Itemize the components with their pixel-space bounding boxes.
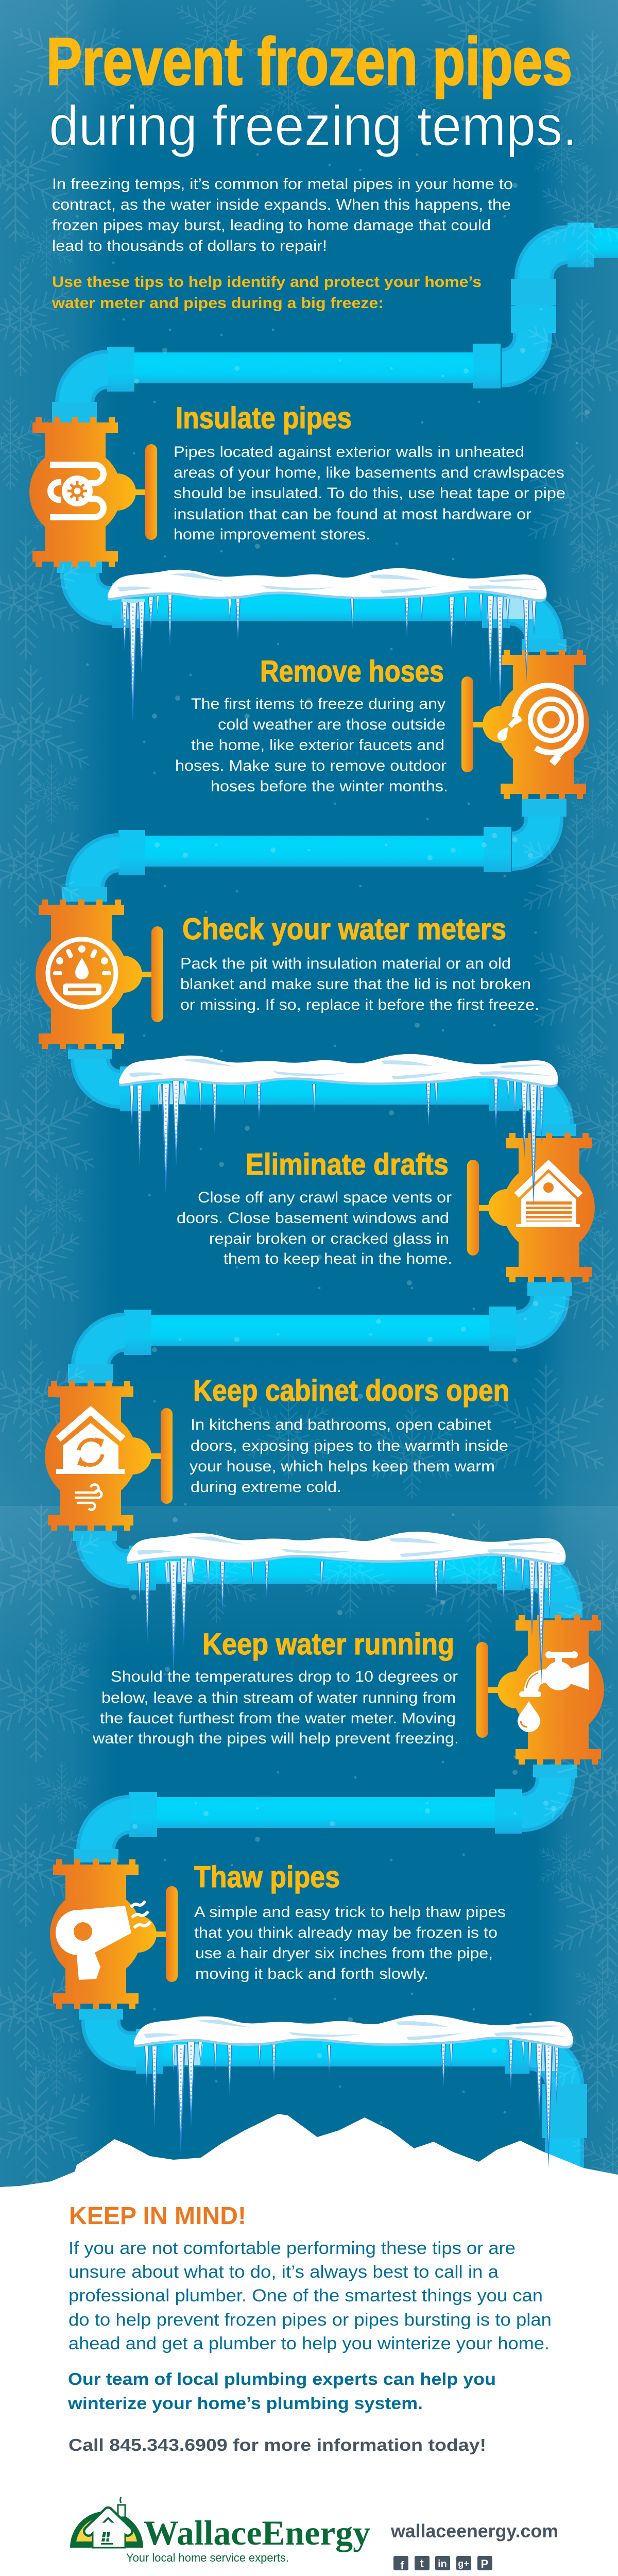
pipe run: valve 6 to valve 7 (74, 1765, 577, 1862)
Wallace Energy logo: Your local home service experts. (126, 2551, 289, 2564)
tip: Check your water meters: Check your water meters (182, 912, 506, 946)
title: during freezing temps. (49, 94, 577, 158)
tip: Keep water running (92, 1628, 459, 1747)
tip: Remove hoses: the home, like exterior faucets and (191, 737, 444, 754)
tip: Keep water running: Keep water running (202, 1628, 454, 1661)
intro text (52, 176, 513, 255)
valve 7 with hair dryer icon (50, 1859, 178, 2009)
Wallace Energy logo (70, 2497, 370, 2564)
pipe run: valve 4 to valve 5 (68, 1282, 572, 1383)
snow cap and icicles 3 (127, 1532, 565, 1685)
social icons: t (420, 2557, 424, 2570)
tip: Thaw pipes: moving it back and forth slowly. (195, 1965, 428, 1982)
social icons: f (400, 2559, 404, 2572)
tip: Remove hoses (175, 655, 448, 795)
tip: Remove hoses: hoses before the winter months. (211, 778, 448, 795)
tip: Thaw pipes: Thaw pipes (194, 1860, 340, 1894)
keep in mind paragraph: ahead and get a plumber to help you winterize your home. (68, 2334, 550, 2353)
pipe run: valve 1 to valve 2 (57, 562, 566, 652)
tip: Thaw pipes (194, 1860, 506, 1982)
tip: Keep cabinet doors open (190, 1374, 509, 1496)
pipe run: valve 3 to valve 4 (68, 1049, 576, 1136)
keep in mind paragraph: professional plumber. One of the smartest things you can (68, 2286, 543, 2306)
keep in mind paragraph (68, 2239, 552, 2353)
keep in mind paragraph: do to help prevent frozen pipes or pipes bursting is to plan (68, 2310, 552, 2330)
keep in mind paragraph: If you are not comfortable performing these tips or are (68, 2239, 516, 2258)
valve 6 with faucet icon (476, 1615, 604, 1765)
tip: Insulate pipes (174, 401, 565, 543)
tip: Remove hoses: cold weather are those outside (218, 716, 445, 733)
icon: garden hose (497, 685, 581, 764)
tip: Eliminate drafts: doors. Close basement windows and (177, 1210, 449, 1227)
intro text: contract, as the water inside expands. When this happens, the (52, 196, 511, 213)
valve 1 with pipe insulation icon (29, 417, 157, 567)
tip: Keep water running: Should the temperatures drop to 10 degrees or (111, 1668, 458, 1685)
tip: Check your water meters: blanket and make sure that the lid is not broken (180, 976, 531, 993)
snowy ground (0, 2114, 618, 2576)
social icons: g+ (458, 2558, 469, 2569)
tip: Thaw pipes: that you think already may be frozen is to (194, 1924, 497, 1941)
tip: Insulate pipes: should be insulated. To do this, use heat tape or pipe (174, 485, 565, 502)
tip: Keep cabinet doors open: your house, which helps keep them warm (190, 1458, 495, 1475)
tip: Check your water meters (180, 912, 539, 1013)
tip: Thaw pipes: use a hair dryer six inches from the pipe, (195, 1945, 493, 1962)
social icons (393, 2556, 492, 2572)
tip: Keep water running: below, leave a thin stream of water running from (101, 1689, 456, 1706)
pipe run: top (52, 223, 618, 422)
plumbing experts callout (67, 2369, 496, 2413)
tip: Eliminate drafts: Eliminate drafts (246, 1148, 449, 1181)
social icons: in (438, 2558, 447, 2570)
heading: keep in mind: KEEP IN MIND! (69, 2202, 246, 2230)
pipe run: valve 5 to valve 6 (73, 1531, 582, 1618)
tip: Insulate pipes: home improvement stores. (174, 526, 370, 543)
keep in mind paragraph: unsure about what to do, it’s always best to call in a (68, 2262, 499, 2282)
Wallace Energy logo: WallaceEnergy (144, 2513, 370, 2552)
call to action: Call 845.343.6909 for more information today! (68, 2435, 486, 2454)
tip: Eliminate drafts: Close off any crawl space vents or (198, 1189, 452, 1206)
icon: pipe insulation (50, 465, 104, 517)
snow cap and icicles 2 (119, 1054, 558, 1207)
tip: Eliminate drafts: repair broken or cracked glass in (209, 1230, 449, 1247)
tip: Keep water running: water through the pipes will help prevent freezing. (92, 1730, 459, 1747)
plumbing experts callout: winterize your home’s plumbing system. (67, 2394, 423, 2413)
tip: Eliminate drafts: them to keep heat in the home. (224, 1250, 452, 1267)
website: wallaceenergy.com (390, 2520, 558, 2541)
intro callout: Use these tips to help identify and protect your home’s (52, 274, 482, 291)
tip: Insulate pipes: Pipes located against exterior walls in unheated (174, 444, 524, 461)
icon: house with garage door (516, 1164, 580, 1227)
intro text: lead to thousands of dollars to repair! (52, 238, 327, 255)
tip: Keep water running: the faucet furthest from the water meter. Moving (100, 1710, 456, 1727)
tip: Eliminate drafts (177, 1148, 452, 1267)
tip: Check your water meters: Pack the pit with insulation material or an old (180, 955, 511, 972)
icon: hair dryer (56, 1901, 150, 1980)
pipe run: valve 2 to valve 3 (62, 799, 566, 902)
tip: Check your water meters: or missing. If so, replace it before the first freeze. (180, 996, 539, 1013)
plumbing experts callout: Our team of local plumbing experts can help you (68, 2369, 496, 2388)
snow cap and icicles 1 (108, 568, 546, 723)
falling snow dots (77, 118, 587, 2123)
tip: Remove hoses: Remove hoses (260, 655, 444, 688)
tip: Insulate pipes: insulation that can be found at most hardware or (174, 506, 531, 523)
pipe run: valve 7 to ground (79, 2009, 587, 2179)
tip: Remove hoses: hoses. Make sure to remove outdoor (175, 757, 447, 774)
tip: Keep cabinet doors open: In kitchens and bathrooms, open cabinet (191, 1416, 492, 1433)
valve 3 with water meter icon (36, 900, 163, 1049)
tip: Keep cabinet doors open: during extreme cold. (191, 1479, 341, 1496)
intro callout: water meter and pipes during a big freeze: (52, 295, 384, 312)
intro text: In freezing temps, it’s common for metal pipes in your home to (52, 176, 513, 193)
tip: Keep cabinet doors open: doors, exposing pipes to the warmth inside (191, 1437, 508, 1454)
tip: Insulate pipes: Insulate pipes (176, 401, 352, 435)
tip: Keep cabinet doors open: Keep cabinet doors open (193, 1374, 509, 1408)
tip: Remove hoses: The first items to freeze during any (191, 696, 445, 713)
icon: water meter gauge (48, 939, 116, 1007)
tip: Thaw pipes: A simple and easy trick to help thaw pipes (194, 1904, 506, 1921)
valve 2 with hose icon (461, 650, 589, 799)
intro callout (52, 274, 482, 312)
tip: Insulate pipes: areas of your home, like basements and crawlspaces (174, 464, 564, 481)
title (46, 24, 577, 158)
valve 5 with house and wind icon (45, 1381, 173, 1531)
snow cap and icicles 4 (134, 2015, 573, 2168)
icon: faucet and drop (518, 1651, 589, 1732)
icon: house with airflow (56, 1411, 125, 1510)
valve 4 with house icon (467, 1133, 595, 1282)
social icons: P (481, 2557, 488, 2570)
intro text: frozen pipes may burst, leading to home damage that could (52, 217, 491, 234)
icon: logo house (70, 2497, 143, 2548)
